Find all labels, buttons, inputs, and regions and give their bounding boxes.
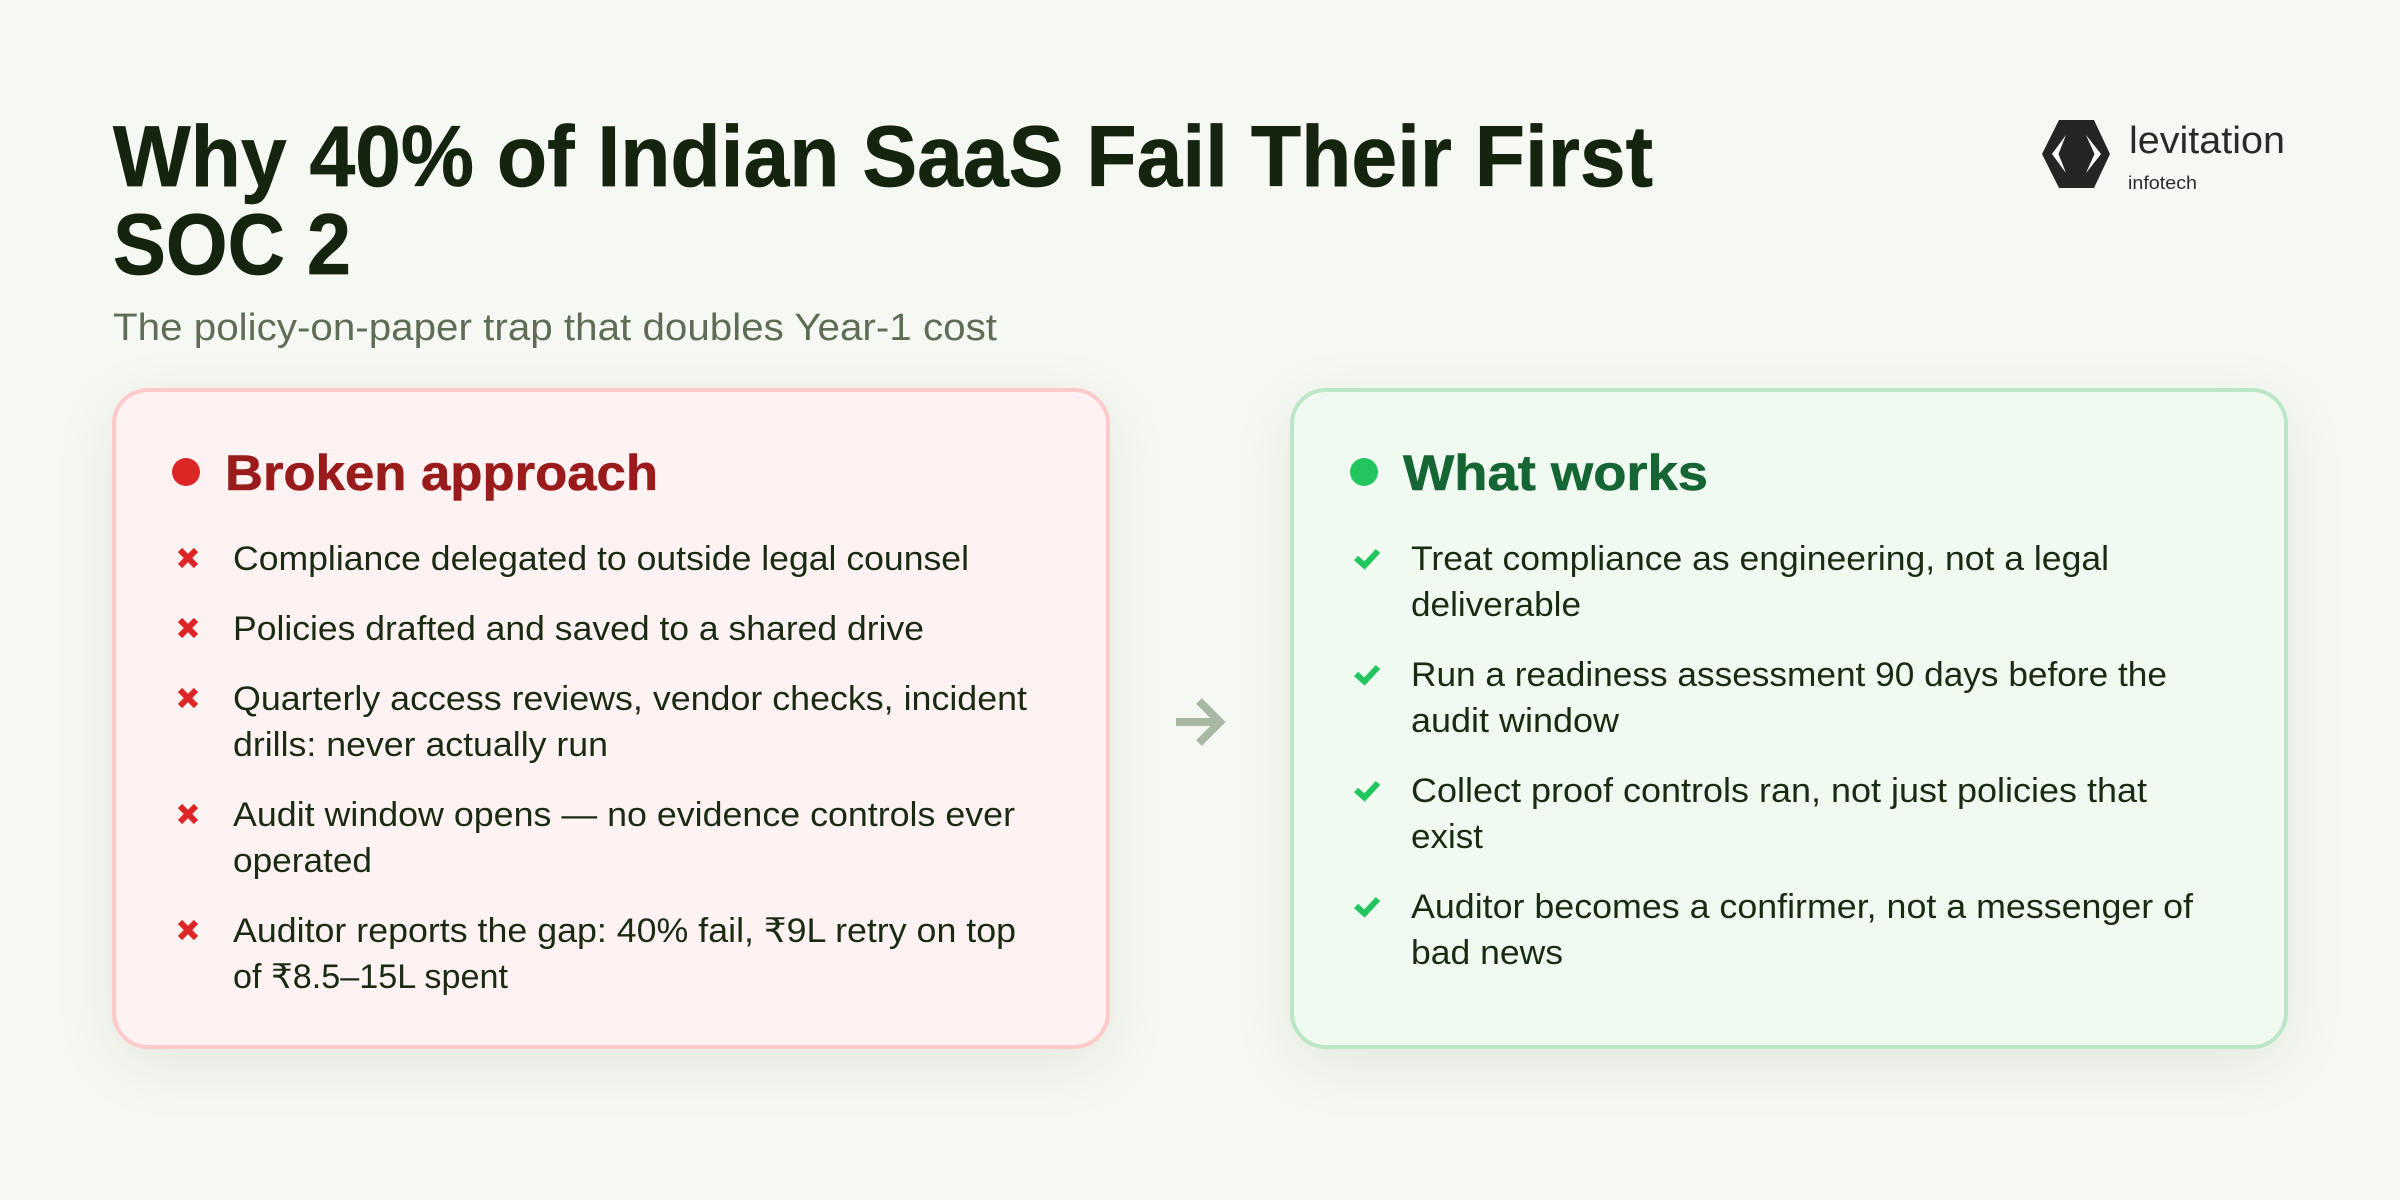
arrow [1176, 698, 1226, 746]
list item: no evidence: operated [233, 842, 372, 880]
list item: auditor confirmer: bad news [1411, 934, 1563, 972]
panel heading: what works: What works [1403, 445, 1708, 501]
list item: no evidence [180, 796, 1015, 880]
list item: readiness assessment: audit window [1411, 702, 1619, 740]
title: Why 40% of Indian SaaS Fail Their First [113, 109, 1653, 205]
list item: shared drive: Policies drafted and saved to a shared drive [233, 610, 924, 648]
list item: collect proof: exist [1411, 818, 1484, 856]
list item: no evidence: Audit window opens — no evidence controls ever [233, 796, 1015, 834]
list item: reviews never run [180, 680, 1028, 764]
logo wordmark: infotech [2128, 173, 2197, 193]
list item: auditor reports gap: Auditor reports the gap: 40% fail, ₹9L retry on top [233, 912, 1016, 950]
panel: broken approach [112, 388, 1110, 1049]
list item: auditor reports gap: of ₹8.5–15L spent [233, 958, 509, 996]
list item: engineering: Treat compliance as engineering, not a legal [1411, 540, 2109, 578]
list item: engineering: deliverable [1411, 586, 1581, 624]
list item: readiness assessment [1356, 656, 2167, 740]
panel heading: broken approach: Broken approach [225, 445, 658, 501]
list item: auditor confirmer [1356, 888, 2194, 972]
list item: auditor reports gap [180, 912, 1016, 996]
logo: levitation infotech [2042, 120, 2285, 193]
list item: collect proof: Collect proof controls ran, not just policies that [1411, 772, 2148, 810]
subtitle: The policy-on-paper trap that doubles Year-1 cost [113, 307, 997, 349]
list item: collect proof [1356, 772, 2148, 856]
panel: what works [1290, 388, 2288, 1049]
list item: outside legal counsel: Compliance delegated to outside legal counsel [233, 540, 969, 578]
logo wordmark [2128, 120, 2285, 193]
title: SOC 2 [113, 197, 351, 293]
title [113, 109, 1653, 293]
list item: engineering [1356, 540, 2109, 624]
list item: readiness assessment: Run a readiness assessment 90 days before the [1411, 656, 2167, 694]
logo wordmark: levitation [2129, 120, 2285, 162]
list item: reviews never run: drills: never actually run [233, 726, 608, 764]
list item: auditor confirmer: Auditor becomes a confirmer, not a messenger of [1411, 888, 2194, 926]
header: title and subtitle [112, 109, 1653, 349]
list item: reviews never run: Quarterly access reviews, vendor checks, incident [233, 680, 1028, 718]
icon: hexagon logo mark [2042, 120, 2110, 188]
